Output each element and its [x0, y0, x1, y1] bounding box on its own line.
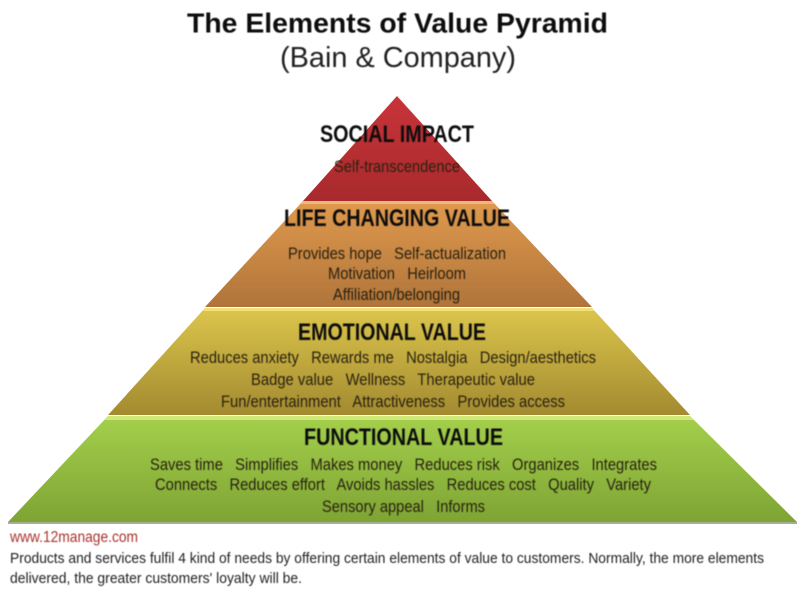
title: The Elements of Value Pyramid — [187, 8, 608, 38]
description: delivered, the greater customers' loyalty will be. — [10, 570, 302, 587]
tier: functional value — [8, 416, 797, 524]
tier: emotional value: Reduces anxiety Rewards me Nostalgia Design/aesthetics — [190, 348, 596, 367]
tier: life changing value: Motivation Heirloom — [328, 264, 466, 283]
tier: functional value: Sensory appeal Informs — [322, 497, 485, 516]
tier: life changing value: Provides hope Self-actualization — [288, 244, 506, 263]
tier: emotional value: Badge value Wellness Therapeutic value — [251, 370, 535, 389]
tier: life changing value: Affiliation/belonging — [333, 285, 460, 304]
tier: emotional value: EMOTIONAL VALUE — [298, 319, 486, 346]
title — [187, 8, 608, 74]
source link: www.12manage.com — [9, 529, 138, 546]
tier: functional value: Saves time Simplifies Makes money Reduces risk Organizes Integrates — [150, 455, 657, 474]
tier: life changing value — [205, 201, 592, 307]
title: (Bain & Company) — [280, 42, 516, 74]
tier: functional value: Connects Reduces effort Avoids hassles Reduces cost Quality Variety — [155, 475, 651, 494]
tier: emotional value: Fun/entertainment Attractiveness Provides access — [221, 392, 565, 411]
tier: life changing value: LIFE CHANGING VALUE — [284, 205, 510, 232]
pyramid — [8, 96, 797, 524]
description — [10, 550, 764, 587]
tier: social impact: Self-transcendence — [334, 157, 460, 176]
tier: functional value: FUNCTIONAL VALUE — [304, 424, 503, 451]
tier: social impact — [303, 96, 492, 201]
tier: social impact: SOCIAL IMPACT — [320, 121, 474, 148]
tier: emotional value — [108, 308, 690, 415]
